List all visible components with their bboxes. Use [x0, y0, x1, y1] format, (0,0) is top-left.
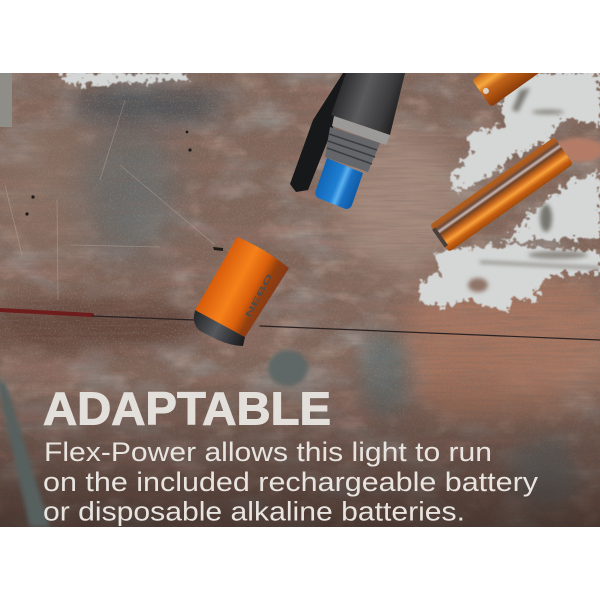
body copy [43, 437, 539, 526]
dark pinholes [25, 131, 223, 251]
large orange battery [429, 137, 573, 253]
blue cap [315, 158, 363, 209]
grey swatch top left [0, 73, 12, 127]
pocket clip [290, 73, 352, 192]
orange body [195, 237, 289, 337]
silver ring [332, 116, 390, 145]
heading: ADAPTABLE: ADAPTABLE [43, 382, 331, 434]
small orange battery, top [473, 73, 539, 106]
orange cylinder cap with logo [194, 237, 289, 346]
threaded section [325, 127, 380, 172]
white paint: flaking patches [60, 73, 600, 312]
scratch line: red and black [0, 310, 600, 340]
body line 1: Flex-Power allows this light to run [44, 437, 492, 467]
pen body [331, 73, 405, 135]
black base [194, 310, 245, 346]
logo mark: NEBO [244, 272, 274, 319]
flashlight pen: clip, body, thread and blue battery cap [290, 73, 405, 209]
grey band: diagonal scrape [0, 378, 50, 527]
weathered marks on the paint [468, 88, 600, 292]
thread ridges [327, 134, 377, 164]
workbench surface [0, 73, 600, 527]
light scratches on the wood [5, 100, 215, 300]
grey patch: round stain [268, 350, 308, 386]
body line 3: or disposable alkaline batteries. [43, 496, 465, 526]
body line 2: on the included rechargeable battery [43, 467, 539, 497]
